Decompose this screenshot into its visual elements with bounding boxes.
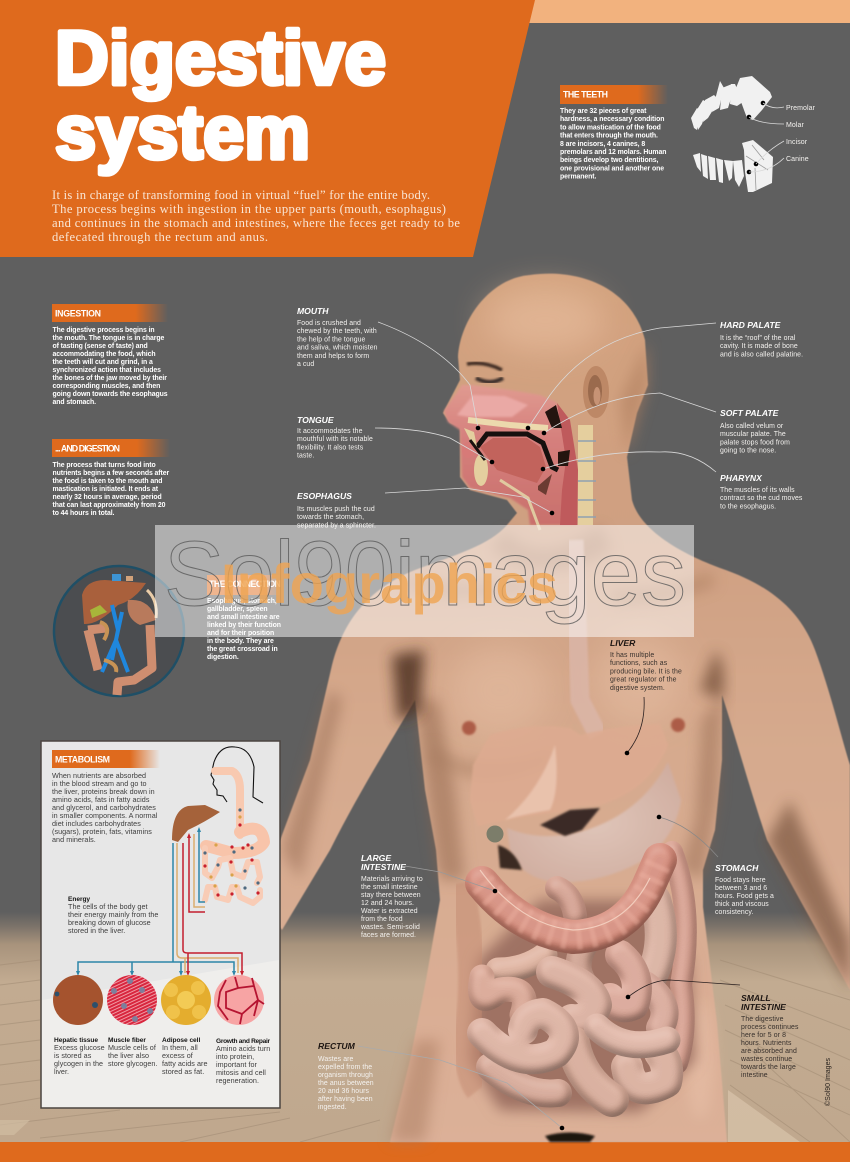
- connection text: and small intestine are: [207, 614, 280, 621]
- callout: esophagus: towards the stomach,: [297, 514, 364, 521]
- callout: pharynx: [720, 473, 803, 510]
- callout: hard palate: cavity. It is made of bone: [720, 343, 798, 350]
- callout: esophagus: [297, 491, 376, 529]
- callout: pharynx: to the esophagus.: [720, 503, 776, 510]
- callout: large intestine: stay there between: [361, 892, 421, 899]
- tooth labels: Incisor: [786, 139, 808, 146]
- connection heading: [207, 575, 283, 595]
- icon: nutrient dots: [203, 823, 260, 897]
- transverse colon: [480, 860, 660, 937]
- callout: esophagus: Its muscles push the cud: [297, 506, 375, 513]
- pink nasal and oral section: [444, 385, 577, 525]
- callout: liver: great regulator of the: [610, 677, 677, 684]
- callout: large intestine: Materials arriving to: [361, 876, 423, 883]
- head section: mouth and throat: [444, 363, 609, 530]
- icon: upper and lower teeth: [691, 76, 773, 192]
- callout: small intestine: here for 5 or 8: [741, 1032, 786, 1039]
- connection text: in the body. They are: [207, 638, 274, 645]
- metabolism text: and minerals.: [52, 835, 96, 844]
- dark cavity under liver: [540, 808, 600, 836]
- eye and brow: [467, 363, 503, 382]
- callout: esophagus: ESOPHAGUS: [297, 491, 352, 501]
- callout: large intestine: LARGE: [361, 853, 391, 863]
- callout: small intestine: intestine: [741, 1072, 768, 1079]
- wooden floor: [0, 912, 850, 1144]
- callout: liver: digestive system.: [610, 685, 665, 692]
- light orange top band: [525, 0, 850, 23]
- callout: stomach: [715, 863, 774, 916]
- credit: ©Sol90 Images: [824, 1058, 832, 1106]
- teeth text: 8 are incisors, 4 canines, 8: [560, 141, 645, 148]
- tissue captions: excess of: [162, 1051, 193, 1060]
- tissue captions: Muscle cells of: [108, 1043, 156, 1052]
- connection text: the great crossroad in: [207, 646, 278, 653]
- tissue captions: Hepatic tissue: [54, 1037, 98, 1044]
- callout: soft palate: Also called velum or: [720, 423, 784, 430]
- pharynx wall: [557, 403, 578, 525]
- esophagus tube: [574, 540, 598, 735]
- digestion heading: ... AND DIGESTION: [55, 444, 120, 454]
- callout: stomach: hours. Food gets a: [715, 893, 774, 900]
- tissue captions: the liver also: [108, 1051, 149, 1060]
- callout: soft palate: going to the nose.: [720, 448, 776, 455]
- title banner: [0, 0, 535, 257]
- growth and repair circle: [214, 975, 264, 1025]
- adipose cell circle: [161, 975, 211, 1025]
- digestion text: mastication is initiated. It ends at: [52, 486, 159, 493]
- metabolism text: in the blood stream and go to: [52, 779, 147, 788]
- connection text: digestion.: [207, 654, 239, 661]
- callout: small intestine: SMALL: [741, 993, 771, 1003]
- connection text: and for their position: [207, 630, 274, 637]
- callout: small intestine: INTESTINE: [741, 1002, 786, 1012]
- energy note: The cells of the body get: [68, 902, 148, 911]
- metabolism text: in smaller components. A normal: [52, 811, 158, 820]
- title: system: [55, 90, 310, 176]
- callout: hard palate: and is also called palatine.: [720, 351, 803, 358]
- energy note: their energy mainly from the: [68, 910, 158, 919]
- callout: small intestine: process continues: [741, 1024, 799, 1031]
- tongue: [480, 438, 546, 483]
- callout: small intestine: wastes continue: [740, 1056, 792, 1063]
- callout: rectum: after having been: [318, 1096, 373, 1103]
- panel: the teeth: [560, 76, 816, 192]
- callout: stomach: Food stays here: [715, 877, 766, 884]
- tissue captions: regeneration.: [216, 1076, 259, 1085]
- digestion text: the food is taken to the mouth and: [52, 478, 162, 485]
- teeth text: premolars and 12 molars. Human: [560, 149, 666, 156]
- dark airway patches: [538, 405, 570, 495]
- callout: mouth: chewed by the teeth, with: [297, 328, 377, 335]
- teeth text: that enters through the mouth.: [560, 133, 658, 140]
- liver: [470, 724, 668, 826]
- callout: stomach: thick and viscous: [715, 901, 769, 908]
- callout: soft palate: SOFT PALATE: [720, 408, 779, 418]
- ingestion text: synchronized action that includes: [52, 367, 161, 374]
- ingestion text: corresponding muscles, and then: [52, 383, 160, 390]
- callout: soft palate: palate stops food from: [720, 439, 790, 446]
- hard palate: [468, 420, 548, 428]
- ingestion text: accommodating the food, which: [52, 351, 155, 358]
- stomach: [507, 762, 681, 882]
- callout: rectum: Wastes are: [318, 1056, 353, 1063]
- tissue captions: glycogen in the: [54, 1059, 103, 1068]
- tissue captions: is stored as: [54, 1051, 92, 1060]
- digestion text: to 44 hours in total.: [52, 510, 115, 517]
- watermark: Infographics: [221, 552, 558, 615]
- tissue captions: In them, all: [162, 1043, 198, 1052]
- muscle shading: [282, 288, 850, 1142]
- ear: [583, 366, 609, 418]
- callout: large intestine: [360, 853, 423, 939]
- ingestion text: the mouth. The tongue is in charge: [52, 335, 164, 342]
- ingestion text: going down towards the esophagus: [52, 391, 168, 398]
- tissue captions: Excess glucose: [54, 1043, 105, 1052]
- callout: mouth: MOUTH: [297, 306, 329, 316]
- callout: rectum: 20 and 36 hours: [318, 1088, 369, 1095]
- callout: tongue: taste.: [297, 453, 314, 460]
- tissue captions: mitosis and cell: [216, 1068, 266, 1077]
- connection heading: THE CONNECTION: [209, 579, 281, 589]
- intro text: The process begins with ingestion in the upper parts (mouth, esophagus): [52, 202, 446, 216]
- bottom orange bar: [0, 1142, 850, 1162]
- callout: large intestine: Water is extracted: [361, 908, 418, 915]
- callout: mouth: a cud: [297, 361, 314, 368]
- tooth labels: [749, 103, 816, 172]
- callout: large intestine: from the food: [361, 916, 403, 923]
- gallbladder: [486, 826, 504, 842]
- callout: stomach: consistency.: [715, 909, 753, 916]
- metabolism text: (sugars), protein, fats, vitamins: [52, 827, 152, 836]
- energy note: breaking down of glucose: [68, 918, 151, 927]
- tooth labels: Premolar: [786, 105, 816, 112]
- intro text: defecated through the rectum and anus.: [52, 230, 268, 244]
- organ inset circle: [54, 566, 184, 696]
- digestion text: that can last approximately from 20: [52, 502, 166, 509]
- muscle fiber circle: [107, 975, 157, 1025]
- title: [55, 16, 386, 176]
- callout: small intestine: The digestive: [741, 1016, 784, 1023]
- callout: hard palate: It is the “roof” of the oral: [720, 335, 796, 342]
- panel: ingestion: [52, 304, 168, 406]
- callout: tongue: [297, 415, 373, 460]
- callout: liver: It has multiple: [610, 652, 654, 659]
- groin shadow: [545, 1132, 595, 1142]
- callout: rectum: ingested.: [318, 1104, 347, 1111]
- tissue captions: stored as fat.: [162, 1067, 204, 1076]
- metabolism text: and glycerol, and carbohydrates: [52, 803, 156, 812]
- intro text: [52, 188, 460, 244]
- tissue captions: into protein,: [216, 1052, 254, 1061]
- spine: [578, 425, 596, 525]
- callout: large intestine: wastes. Semi-solid: [360, 924, 420, 931]
- tissue captions: Adipose cell: [162, 1037, 200, 1044]
- tissue captions: [54, 1037, 270, 1085]
- callout: large intestine: 12 and 24 hours.: [361, 900, 414, 907]
- ingestion text: The digestive process begins in: [52, 327, 155, 334]
- tissue captions: Amino acids turn: [216, 1044, 270, 1053]
- metabolism text: amino acids, fats in fatty acids: [52, 795, 150, 804]
- icon: head profile: [211, 747, 263, 803]
- nutrient flow arrows: [78, 831, 242, 973]
- panel: metabolism: [41, 741, 280, 1108]
- callout: rectum: expelled from the: [318, 1064, 372, 1071]
- callout: pharynx: contract so the cud moves: [720, 495, 803, 502]
- callout: mouth: [297, 306, 378, 368]
- ingestion text: and stomach.: [52, 399, 96, 406]
- callout: stomach: STOMACH: [715, 863, 759, 873]
- intro text: and continues in the stomach and intestines, where the feces get ready to be: [52, 216, 460, 230]
- teeth heading: [560, 85, 668, 104]
- metabolism heading: [52, 750, 160, 768]
- leader lines with dots: [358, 322, 740, 1130]
- tooth labels: Molar: [786, 122, 804, 129]
- nipples: [462, 718, 685, 735]
- teeth text: one provisional and another one: [560, 165, 664, 172]
- callout: mouth: and saliva, which moisten: [297, 345, 378, 352]
- panel: the connection: [54, 566, 283, 696]
- shadow behind intestines: [470, 900, 695, 1112]
- callout: soft palate: [720, 408, 790, 455]
- tissue captions: Growth and Repair: [216, 1038, 270, 1045]
- callout: stomach: between 3 and 6: [715, 885, 767, 892]
- teeth text: They are 32 pieces of great: [560, 108, 647, 115]
- callout: small intestine: [740, 993, 799, 1079]
- teeth heading: THE TEETH: [563, 90, 608, 100]
- teeth text: permanent.: [560, 174, 597, 181]
- callout: large intestine: the small intestine: [361, 884, 418, 891]
- digestion text: nutrients begins a few seconds after: [52, 470, 169, 477]
- tissue captions: Muscle fiber: [108, 1037, 146, 1044]
- small intestine loops: [480, 888, 667, 1100]
- callout: mouth: Food is crushed and: [297, 320, 361, 327]
- tissue captions: store glycogen.: [108, 1059, 158, 1068]
- body silhouette: [260, 274, 850, 1142]
- connection text: linked by their function: [207, 622, 281, 629]
- tissue captions: liver.: [54, 1067, 69, 1076]
- metabolism text: diet includes carbohydrates: [52, 819, 141, 828]
- callout: soft palate: muscular palate. The: [720, 431, 786, 438]
- callout: tongue: flexibility. It also tests: [297, 444, 364, 451]
- title: Digestive: [55, 16, 386, 101]
- digestive tract diagram: [203, 771, 264, 903]
- callout: pharynx: PHARYNX: [720, 473, 763, 483]
- ingestion text: of tasting (sense of taste) and: [52, 343, 148, 350]
- callout: hard palate: HARD PALATE: [720, 320, 781, 330]
- callout: liver: functions, such as: [610, 660, 668, 667]
- metabolism text: When nutrients are absorbed: [52, 771, 146, 780]
- callout: rectum: organism through: [318, 1072, 373, 1079]
- callout: rectum: the anus between: [318, 1080, 374, 1087]
- intro text: It is in charge of transforming food in virtual “fuel” for the entire body.: [52, 188, 430, 202]
- teeth text: hardness, a necessary condition: [560, 116, 664, 123]
- digestion text: The process that turns food into: [52, 462, 156, 469]
- ingestion text: the bones of the jaw moved by their: [52, 375, 167, 382]
- teeth text: beings develop two dentitions,: [560, 157, 658, 164]
- energy note: Energy: [68, 896, 90, 903]
- callout: rectum: RECTUM: [318, 1041, 356, 1051]
- callout: rectum: [318, 1041, 374, 1111]
- jaw bone and lips: [462, 428, 540, 530]
- ascending colon: [460, 883, 478, 1090]
- watermark: Sol90images: [164, 523, 686, 625]
- energy note: stored in the liver.: [68, 926, 125, 935]
- energy note: [68, 896, 158, 935]
- teeth text: to allow mastication of the food: [560, 124, 661, 131]
- ingestion text: the teeth will cut and grind, in a: [52, 359, 153, 366]
- callout: large intestine: INTESTINE: [361, 862, 406, 872]
- tissue captions: fatty acids are: [162, 1059, 208, 1068]
- metabolism text: the liver, proteins break down in: [52, 787, 155, 796]
- hepatic tissue circle: [53, 975, 103, 1025]
- metabolism heading: METABOLISM: [55, 754, 110, 764]
- callout: small intestine: are absorbed and: [741, 1048, 797, 1055]
- callout: liver: [610, 638, 682, 692]
- connection text: gallbladder, spleen: [207, 606, 268, 613]
- human body illustration: [260, 274, 850, 1142]
- callout: large intestine: faces are formed.: [361, 932, 416, 939]
- panel: digestion: [52, 439, 170, 517]
- callout: esophagus: separated by a sphincter.: [297, 522, 376, 529]
- callout: tongue: mouthful with its notable: [297, 436, 373, 443]
- callout: tongue: TONGUE: [297, 415, 334, 425]
- callout: mouth: the help of the tongue: [297, 336, 366, 343]
- icon: liver: [172, 805, 220, 842]
- descending colon: [672, 852, 686, 1063]
- callout: tongue: It accommodates the: [297, 428, 363, 435]
- callout: small intestine: towards the large: [741, 1064, 796, 1071]
- callout: pharynx: The muscles of its walls: [720, 487, 795, 494]
- callout: small intestine: hours. Nutrients: [741, 1040, 792, 1047]
- callout: liver: producing bile. It is the: [610, 668, 682, 675]
- callout: hard palate: [720, 320, 803, 358]
- callout: mouth: them and helps to form: [297, 353, 369, 360]
- tooth labels: Canine: [786, 156, 809, 163]
- callout: liver: LIVER: [610, 638, 636, 648]
- tissue captions: important for: [216, 1060, 258, 1069]
- ingestion heading: INGESTION: [55, 308, 101, 318]
- digestion text: nearly 32 hours in average, period: [52, 494, 162, 501]
- connection text: Esophagus, stomach,: [207, 598, 277, 605]
